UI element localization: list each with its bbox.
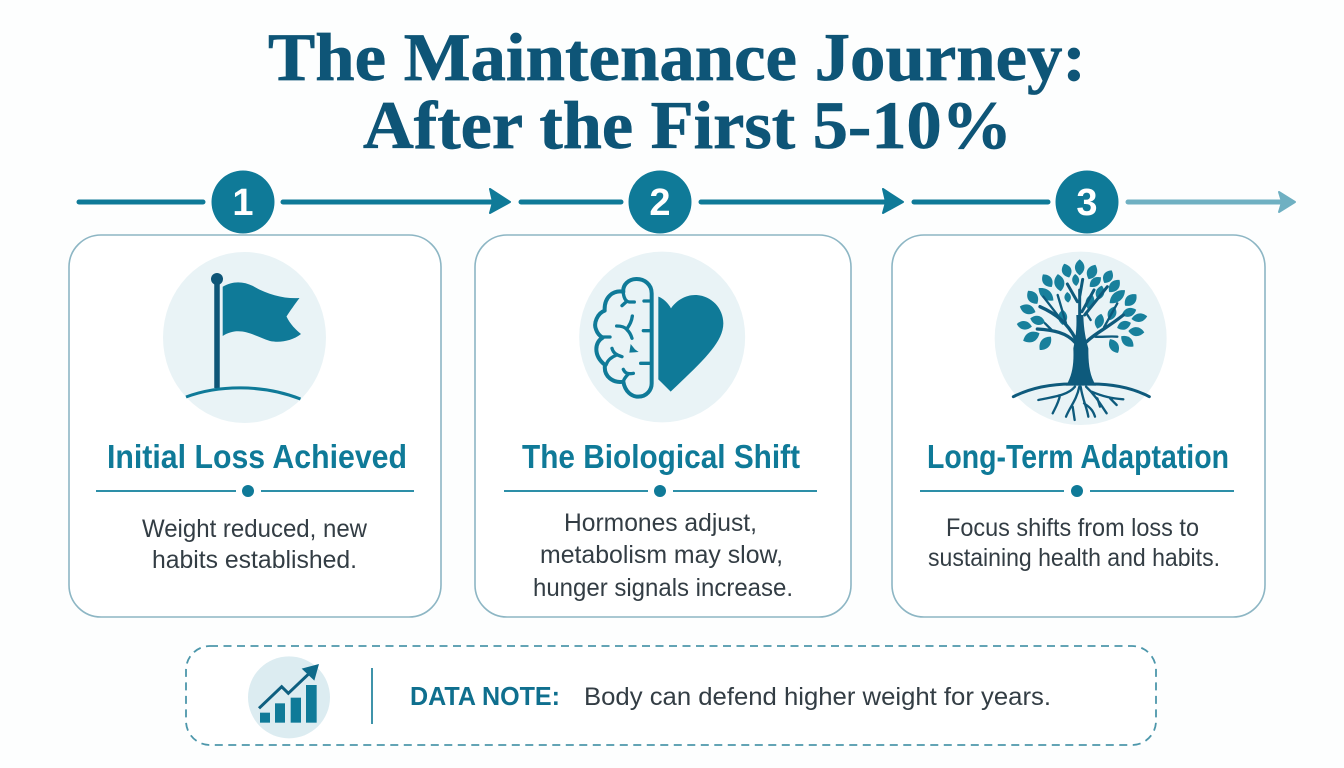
description [142, 515, 368, 574]
data note label: DATA NOTE: [410, 681, 560, 711]
title: After the First 5-10% [363, 87, 1012, 163]
panel: initial loss achieved [69, 235, 441, 617]
icon: tree with roots [995, 252, 1167, 425]
divider [504, 485, 817, 497]
description: metabolism may slow, [540, 541, 783, 569]
heading: Initial Loss Achieved [107, 438, 407, 475]
step 2 marker: 2 [649, 182, 671, 224]
icon: flag on hill [163, 252, 326, 423]
panel: long-term adaptation [892, 235, 1265, 617]
icon: rising bar chart [248, 656, 330, 738]
description: Hormones adjust, [564, 509, 757, 537]
arrow: continuing [1128, 192, 1295, 212]
description: sustaining health and habits. [928, 544, 1220, 572]
step 2 marker [521, 170, 692, 234]
description [928, 514, 1220, 572]
arrow: step 2 to step 3 [701, 189, 903, 213]
title: The Maintenance Journey: [268, 19, 1086, 95]
description: habits established. [152, 546, 357, 574]
timeline [79, 170, 1295, 234]
data note text: Body can defend higher weight for years. [584, 683, 1051, 711]
description: hunger signals increase. [533, 574, 793, 602]
title [268, 19, 1086, 163]
description: Focus shifts from loss to [946, 514, 1199, 542]
divider [96, 485, 414, 497]
separator [371, 668, 373, 724]
divider [920, 485, 1234, 497]
roots [1013, 384, 1149, 420]
callout: data note [186, 646, 1156, 745]
step 3 marker [914, 170, 1118, 234]
description: Weight reduced, new [142, 515, 368, 543]
step 1 marker: 1 [232, 182, 254, 224]
trunk and branches [1037, 279, 1123, 386]
leaves [1016, 259, 1148, 355]
step 3 marker: 3 [1076, 182, 1098, 224]
arrow: step 1 to step 2 [283, 189, 510, 213]
description [533, 509, 793, 602]
panel: the biological shift [475, 235, 851, 617]
heading: The Biological Shift [522, 438, 800, 475]
step 1 marker [79, 170, 274, 234]
icon: brain and heart [579, 252, 745, 422]
heading: Long-Term Adaptation [927, 438, 1229, 475]
